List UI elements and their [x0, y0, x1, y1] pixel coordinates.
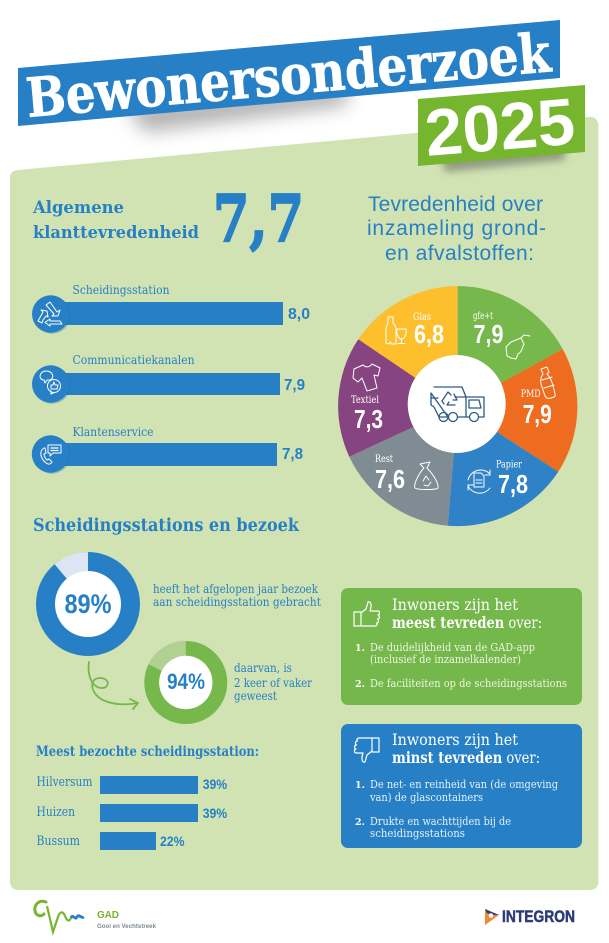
- score 7,7: 7,7: [213, 181, 304, 257]
- bar: Huizen: [36, 804, 228, 822]
- slice: PMD: 7,9: [523, 399, 552, 429]
- heading: scheidingsstations en bezoek: Scheidingsstations en bezoek: [33, 516, 300, 536]
- bar: Bussum: [36, 832, 185, 850]
- slice: Textiel: [338, 339, 458, 457]
- slice: Glas: Glas: [413, 312, 431, 323]
- bar: Communicatiekanalen: Communicatiekanalen: [72, 352, 194, 367]
- text: bezoek scheidingsstation: aan scheidingsstation gebracht: [153, 595, 321, 609]
- logo: GAD: GAD: [97, 910, 119, 921]
- panel: meest tevreden: 1.: [355, 643, 365, 654]
- text: 2 keer of vaker: 2 keer of vaker: [234, 676, 312, 690]
- bar: Communicatiekanalen: 7,9: [284, 377, 305, 394]
- logo: INTEGRON: INTEGRON: [502, 908, 575, 926]
- slice: gfe+t: gfe+t: [473, 311, 493, 322]
- heading: tevredenheid over inzameling: [367, 193, 546, 265]
- icon: t-shirt: [353, 364, 380, 391]
- panel: minst tevreden: Inwoners zijn het: [392, 730, 519, 749]
- slice: Glas: [358, 286, 458, 406]
- donut: 89%: [36, 552, 140, 656]
- icon: chat bubbles: [40, 371, 60, 394]
- panel: meest tevreden: [341, 588, 582, 705]
- donut: 89%: 89%: [64, 589, 112, 619]
- panel: meest tevreden: De faciliteiten op de scheidingsstations: [370, 677, 567, 690]
- panel: minst tevreden: van) de glascontainers: [369, 791, 483, 804]
- bar: Scheidingsstation: Scheidingsstation: [72, 282, 170, 297]
- bar: Bussum: Bussum: [36, 834, 80, 849]
- slice: Papier: Papier: [496, 460, 522, 471]
- panel: minst tevreden: 2.: [355, 817, 365, 828]
- text: 2 keer of vaker: daarvan, is: [234, 661, 292, 675]
- bar: Communicatiekanalen: [32, 352, 305, 404]
- text: bezoek scheidingsstation: heeft het afgelopen jaar bezoek: [153, 582, 319, 596]
- slice: Papier: [448, 406, 558, 526]
- donut chart: waste streams: [338, 286, 577, 526]
- bar: Klantenservice: Klantenservice: [72, 424, 154, 439]
- slice: gfe+t: 7,9: [474, 319, 504, 349]
- slice: Textiel: Textiel: [351, 395, 379, 406]
- text: 2 keer of vaker: [234, 661, 312, 703]
- bar: Bussum: 22%: [160, 833, 185, 849]
- center circle: [408, 355, 506, 453]
- panel: meest tevreden: meest tevreden over:: [392, 613, 542, 632]
- bar: Scheidingsstation: 8,0: [288, 306, 310, 323]
- bar: Klantenservice: [32, 424, 303, 474]
- icon: garbage truck: [431, 387, 484, 422]
- panel: minst tevreden: minst tevreden over:: [392, 748, 540, 767]
- panel: meest tevreden: De duidelijkheid van de GAD-app: [370, 641, 535, 654]
- icon: recycling arrows: [38, 302, 62, 326]
- icon: paper recycling: [468, 470, 490, 493]
- bar: Hilversum: [36, 775, 228, 794]
- heading: tevredenheid over inzameling: inzameling grond-: [367, 217, 546, 240]
- icon: bottle and glass: [386, 317, 406, 344]
- slice: Papier: 7,8: [498, 469, 528, 499]
- slice: Rest: [349, 406, 458, 526]
- logo: GAD: Gooi en Vechtstreek: [97, 924, 157, 930]
- heading: algemene klanttevredenheid: Algemene: [32, 198, 124, 218]
- bar: Hilversum: 39%: [203, 776, 228, 792]
- bar: Klantenservice: 7,8: [282, 446, 303, 463]
- heading: algemene klanttevredenheid: klanttevredenheid: [33, 223, 199, 243]
- slice: Rest: Rest: [375, 454, 393, 465]
- icon: thumb down: [354, 738, 379, 762]
- panel: minst tevreden: 1.: [355, 780, 365, 791]
- bar: Huizen: Huizen: [36, 805, 76, 820]
- heading: algemene klanttevredenheid: [32, 198, 199, 243]
- slice: Textiel: 7,3: [354, 404, 383, 434]
- icon: thumb up: [354, 602, 380, 626]
- slice: gfe+t: [458, 286, 563, 406]
- panel: meest tevreden: 2.: [355, 679, 365, 690]
- panel: minst tevreden: De net- en reinheid van (de omgeving: [370, 778, 558, 791]
- text: 2 keer of vaker: geweest: [234, 689, 277, 703]
- bar: Scheidingsstation: [32, 282, 310, 334]
- icon: plastic bottle: [541, 367, 555, 398]
- logo: GAD: [35, 901, 157, 932]
- icon: waste bag: [415, 462, 438, 490]
- donut: 94%: [144, 641, 227, 724]
- panel: minst tevreden: scheidingsstations: [370, 827, 465, 840]
- slice: PMD: [458, 349, 577, 472]
- slice: PMD: PMD: [521, 389, 541, 400]
- bar: Hilversum: Hilversum: [36, 775, 92, 790]
- panel: minst tevreden: [341, 724, 582, 848]
- heading: tevredenheid over inzameling: en afvalstoffen:: [385, 242, 534, 265]
- bar: Huizen: 39%: [203, 805, 228, 821]
- panel: meest tevreden: (inclusief de inzamelkalender): [370, 653, 521, 666]
- title banner: 2025: 2025: [422, 84, 578, 170]
- icon: phone with message: [41, 445, 61, 464]
- panel: green background: [10, 117, 598, 890]
- panel: minst tevreden: Drukte en wachttijden bij de: [370, 815, 511, 828]
- arrow: curl to 94%: [89, 662, 138, 709]
- heading: meest bezochte scheidingsstation: Meest bezochte scheidingsstation:: [36, 744, 259, 760]
- donut: 94%: 94%: [167, 669, 205, 694]
- slice: Rest: 7,6: [375, 464, 405, 494]
- slice: Glas: 6,8: [414, 319, 444, 349]
- text: bezoek scheidingsstation: [153, 582, 321, 609]
- icon: apple core: [506, 335, 530, 359]
- bar chart: meest bezochte stations: [36, 775, 228, 850]
- panel: meest tevreden: Inwoners zijn het: [392, 595, 519, 614]
- heading: tevredenheid over inzameling: Tevredenheid over: [368, 193, 543, 216]
